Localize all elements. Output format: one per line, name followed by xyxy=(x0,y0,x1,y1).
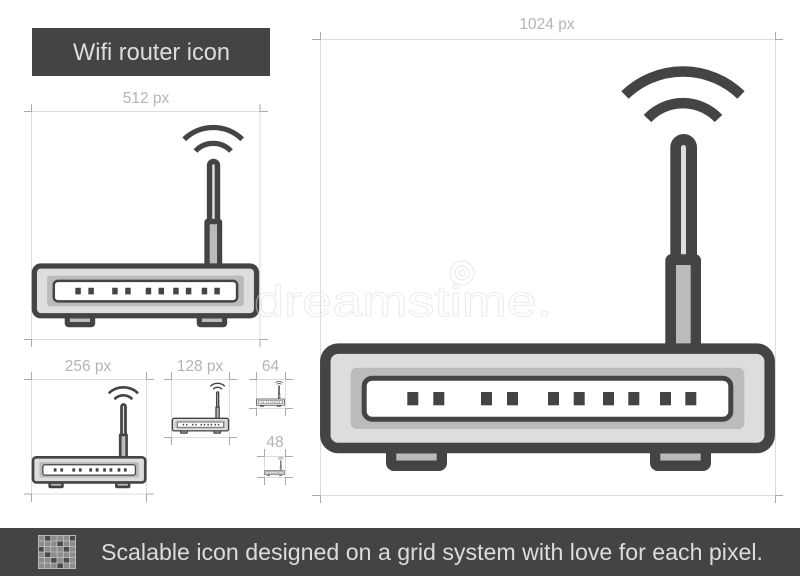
label: 64: 64 xyxy=(262,358,279,375)
feet xyxy=(386,450,711,471)
label: 48: 48 xyxy=(266,434,284,451)
label: 512 px: 512 px xyxy=(123,90,170,107)
icon: wifi router 48 xyxy=(264,457,285,476)
watermark xyxy=(254,261,552,326)
router body xyxy=(325,349,770,448)
panel: 256 px size frame xyxy=(24,372,154,502)
title banner xyxy=(32,28,270,76)
status lights xyxy=(407,392,696,405)
panel: 128 px size frame xyxy=(164,372,237,445)
icon: pixel grid xyxy=(38,535,76,569)
label: 128 px: 128 px xyxy=(177,358,224,375)
panel: 48 px size frame xyxy=(257,449,293,485)
panel: 64 px size frame xyxy=(249,372,293,416)
title banner: Wifi router icon xyxy=(73,39,230,66)
icon: wifi router 128 xyxy=(172,383,229,434)
label: 256 px: 256 px xyxy=(65,358,112,375)
watermark: dreamstime. xyxy=(254,277,552,326)
port band xyxy=(351,368,744,429)
panel: 1024 px size frame xyxy=(312,32,783,503)
icon: wifi router 512 xyxy=(34,127,257,327)
icon: wifi router large xyxy=(325,71,770,471)
footer bar xyxy=(0,528,800,576)
antenna xyxy=(665,134,701,345)
panel: 512 px size frame xyxy=(24,104,268,347)
wifi arcs xyxy=(625,71,741,118)
footer tagline: Scalable icon designed on a grid system with love for each pixel. xyxy=(101,539,763,565)
icon: wifi router 256 xyxy=(33,387,145,488)
port panel xyxy=(364,378,731,419)
label: 1024 px: 1024 px xyxy=(519,16,575,33)
icon: wifi router 64 xyxy=(256,381,285,407)
